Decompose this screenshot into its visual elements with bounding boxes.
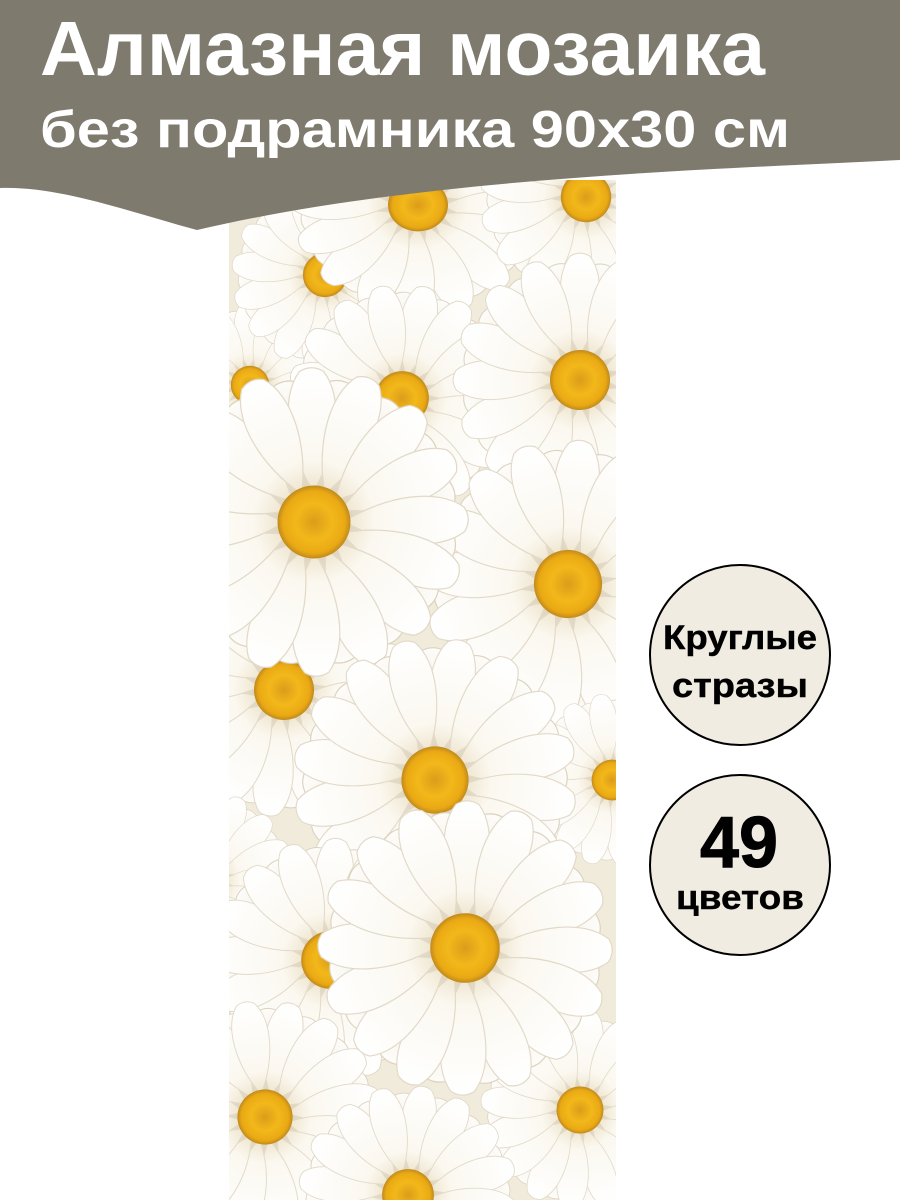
- badge: 49 colours: [650, 775, 830, 955]
- badge: 49 colours: цветов: [676, 879, 804, 917]
- badge: 49 colours: 49: [700, 803, 778, 883]
- title: Алмазная мозаика: [40, 6, 766, 92]
- badge: round rhinestones: [650, 565, 830, 745]
- badge: round rhinestones: Круглые: [663, 619, 817, 657]
- subtitle: без подрамника 90х30 см: [40, 101, 790, 159]
- title banner: [0, 0, 900, 230]
- badge: round rhinestones: стразы: [672, 667, 808, 705]
- diamond mosaic daisy picture: [229, 180, 616, 1200]
